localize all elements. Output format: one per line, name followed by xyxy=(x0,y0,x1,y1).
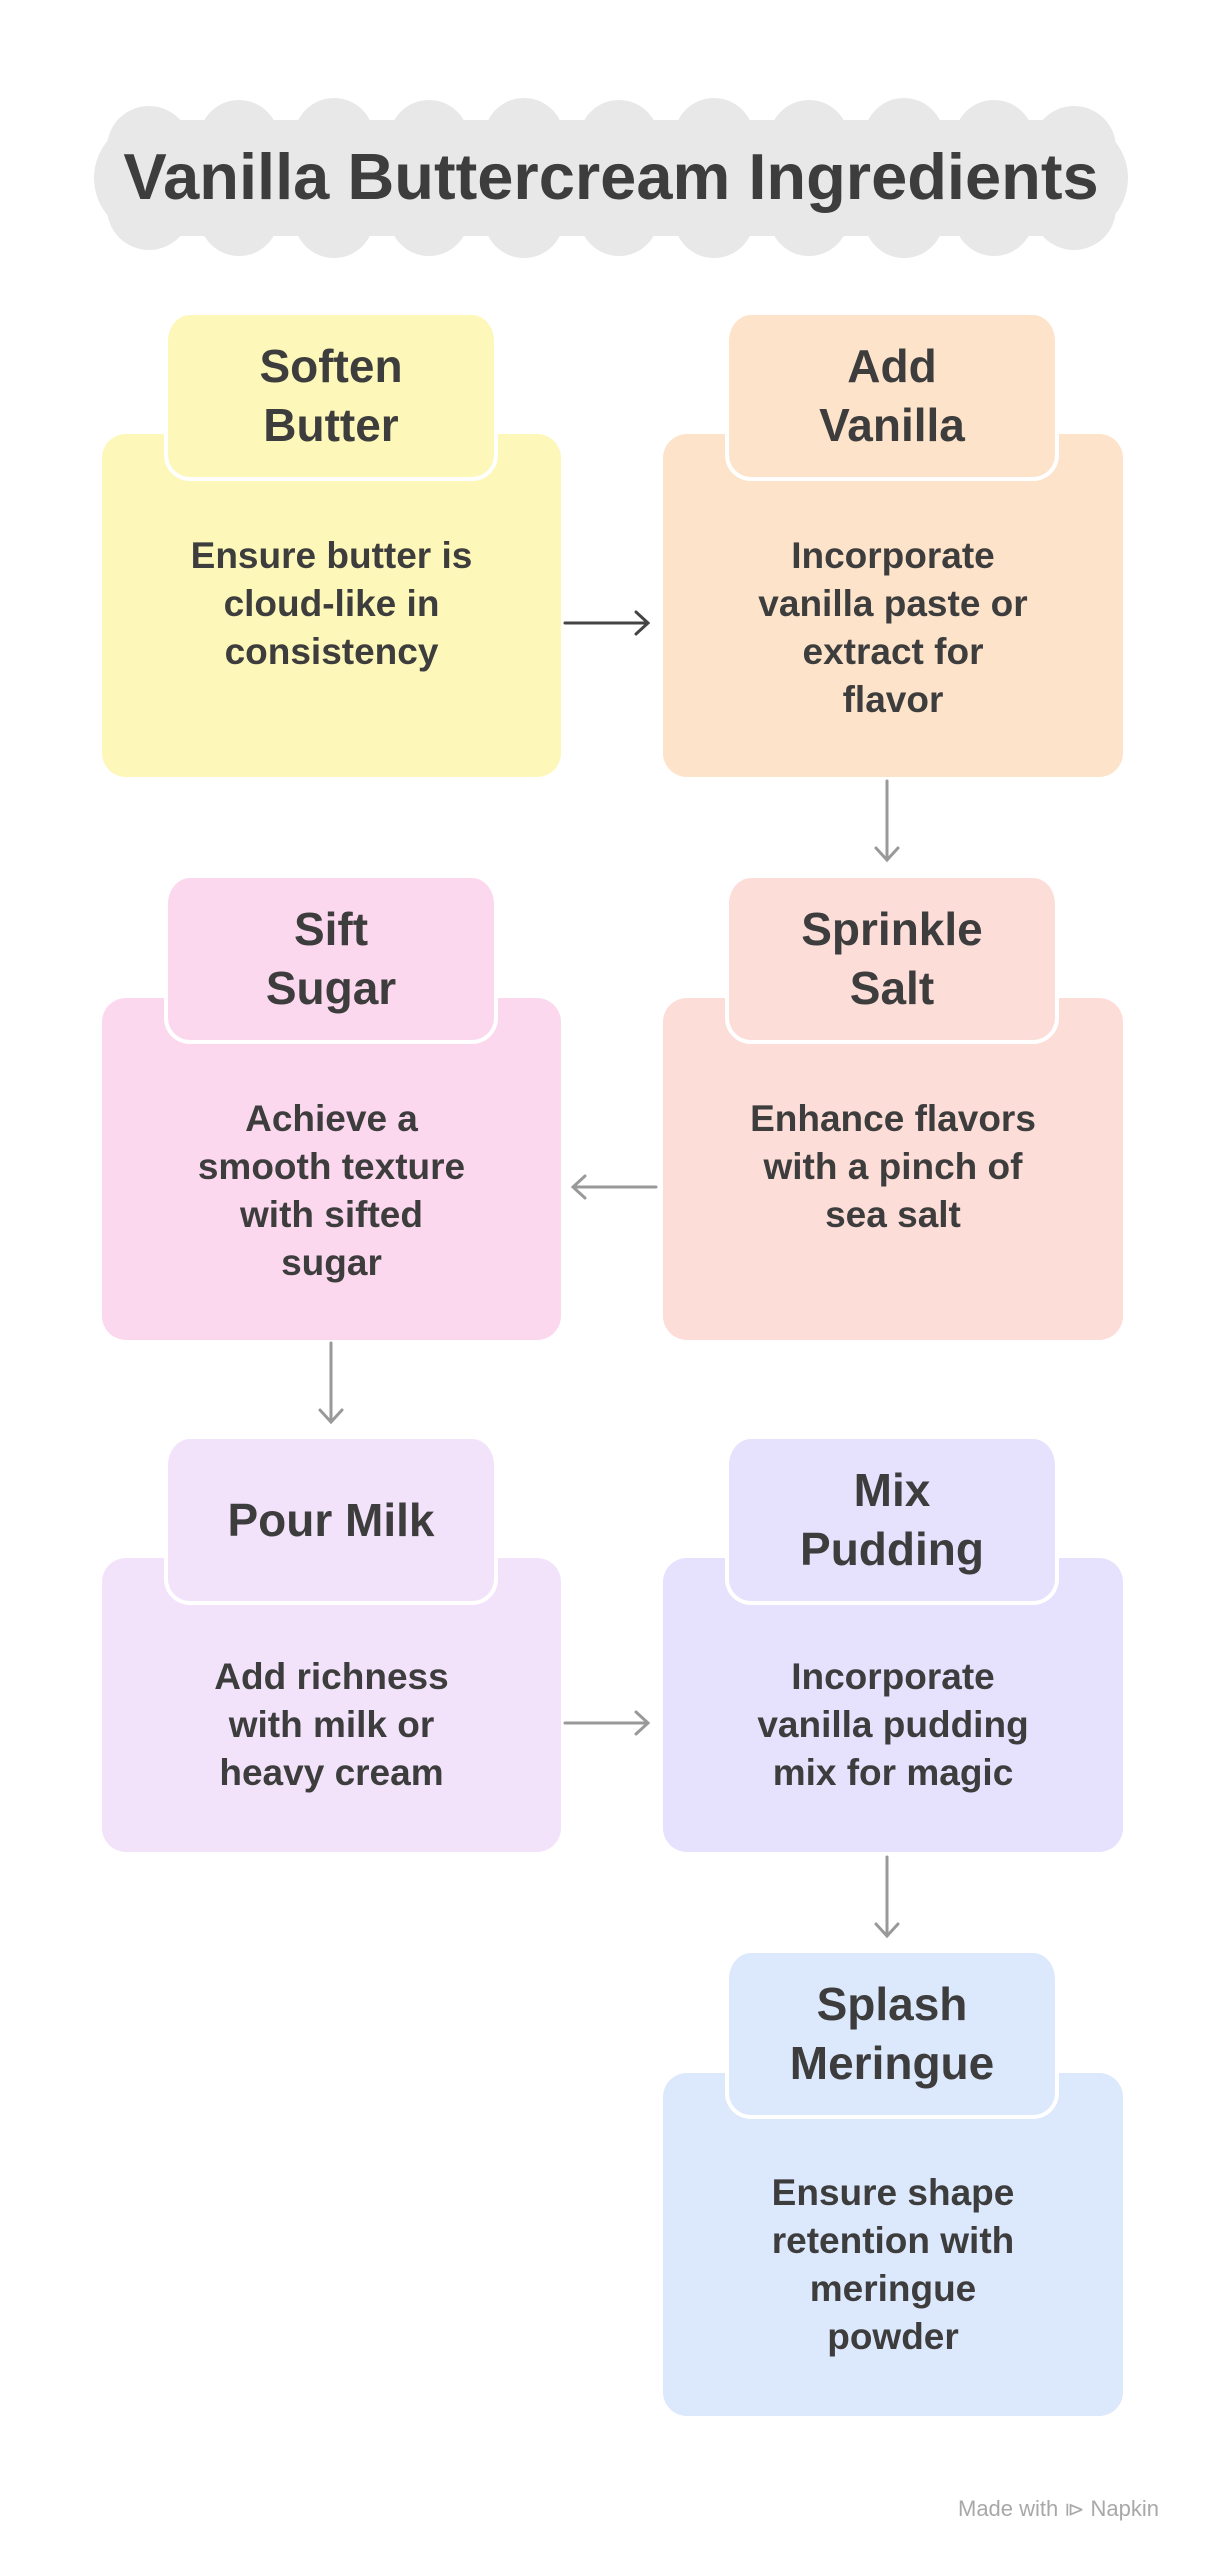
heading: sprinkle salt: Sprinkle xyxy=(801,903,983,955)
text: sift sugar: with sifted xyxy=(240,1194,423,1235)
heading: sift sugar: Sugar xyxy=(266,962,396,1014)
panel: pour milk xyxy=(102,1439,561,1852)
text: soften butter: Ensure butter is xyxy=(191,535,472,576)
heading: sift sugar xyxy=(164,878,498,1044)
heading: soften butter xyxy=(164,315,498,481)
heading: splash meringue xyxy=(725,1953,1059,2119)
text: splash meringue: Ensure shape xyxy=(772,2172,1014,2213)
text: sprinkle salt xyxy=(750,1098,1036,1235)
text: sprinkle salt: Enhance flavors xyxy=(750,1098,1036,1139)
panel: soften butter xyxy=(102,315,561,777)
heading: mix pudding: Pudding xyxy=(800,1523,984,1575)
arrow: pudding to meringue xyxy=(874,1856,900,1938)
text: pour milk: with milk or xyxy=(229,1704,434,1745)
text: sift sugar: Achieve a xyxy=(245,1098,418,1139)
text: splash meringue: retention with xyxy=(772,2220,1014,2261)
text: add vanilla: vanilla paste or xyxy=(758,583,1028,624)
text: soften butter: cloud-like in xyxy=(224,583,439,624)
arrow: vanilla to salt xyxy=(874,780,900,862)
arrow: butter to vanilla xyxy=(564,610,650,636)
text: mix pudding: Incorporate xyxy=(791,1656,995,1697)
heading: splash meringue: Splash xyxy=(817,1978,967,2030)
footer: made with napkin: Made with ⧐ Napkin xyxy=(958,2496,1159,2521)
text: pour milk: heavy cream xyxy=(219,1752,444,1793)
text: soften butter: consistency xyxy=(225,631,438,672)
text: pour milk: Add richness xyxy=(214,1656,449,1697)
text: soften butter xyxy=(191,535,472,672)
text: add vanilla: Incorporate xyxy=(791,535,995,576)
text: add vanilla: extract for xyxy=(803,631,983,672)
heading: sprinkle salt xyxy=(725,878,1059,1044)
text: sprinkle salt: with a pinch of xyxy=(764,1146,1022,1187)
heading: sprinkle salt: Salt xyxy=(850,962,934,1014)
arrow: milk to pudding xyxy=(564,1710,650,1736)
text: add vanilla xyxy=(758,535,1028,720)
heading: pour milk xyxy=(164,1439,498,1605)
heading: mix pudding xyxy=(725,1439,1059,1605)
text: pour milk xyxy=(214,1656,449,1793)
title xyxy=(94,98,1128,258)
text: sift sugar: sugar xyxy=(281,1242,382,1283)
arrow: sugar to milk xyxy=(318,1342,344,1424)
text: sift sugar xyxy=(198,1098,465,1283)
text: splash meringue xyxy=(772,2172,1014,2357)
panel: add vanilla xyxy=(663,315,1123,777)
panel: sift sugar xyxy=(102,878,561,1340)
title: Vanilla Buttercream Ingredients xyxy=(123,140,1099,213)
text: mix pudding xyxy=(757,1656,1029,1793)
heading: mix pudding: Mix xyxy=(854,1464,930,1516)
text: sprinkle salt: sea salt xyxy=(825,1194,961,1235)
panel: splash meringue xyxy=(663,1953,1123,2416)
text: mix pudding: vanilla pudding xyxy=(757,1704,1029,1745)
text: sift sugar: smooth texture xyxy=(198,1146,465,1187)
heading: add vanilla xyxy=(725,315,1059,481)
panel: sprinkle salt xyxy=(663,878,1123,1340)
arrow: salt to sugar xyxy=(570,1174,658,1200)
text: splash meringue: powder xyxy=(827,2316,959,2357)
text: splash meringue: meringue xyxy=(810,2268,976,2309)
text: add vanilla: flavor xyxy=(843,679,943,720)
heading: soften butter: Butter xyxy=(263,399,399,451)
heading: soften butter: Soften xyxy=(259,340,403,392)
text: mix pudding: mix for magic xyxy=(773,1752,1013,1793)
heading: splash meringue: Meringue xyxy=(790,2037,994,2089)
heading: add vanilla: Vanilla xyxy=(819,399,965,451)
heading: pour milk: Pour Milk xyxy=(227,1494,435,1546)
heading: add vanilla: Add xyxy=(847,340,937,392)
panel: mix pudding xyxy=(663,1439,1123,1852)
heading: sift sugar: Sift xyxy=(294,903,368,955)
